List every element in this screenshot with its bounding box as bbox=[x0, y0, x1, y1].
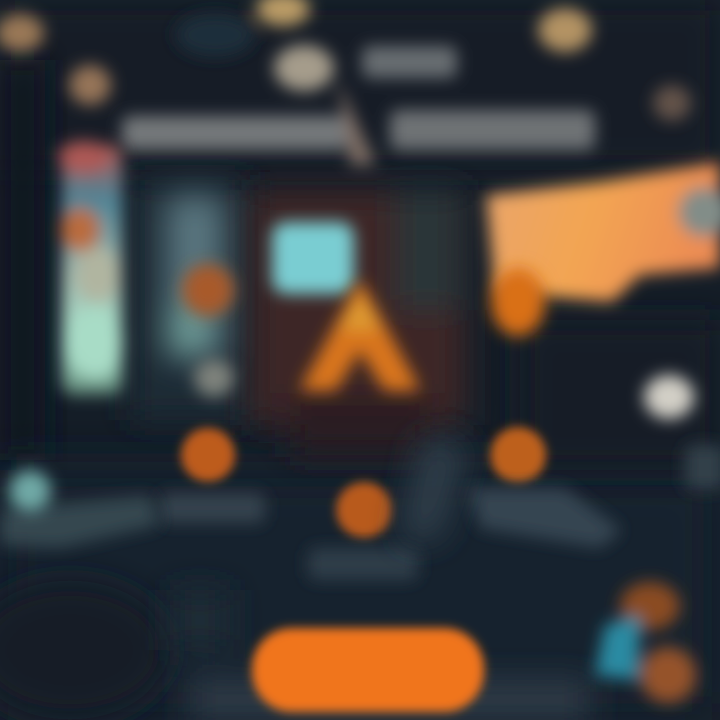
orange node: lower centre bbox=[308, 482, 418, 580]
orange node: lower left bbox=[160, 428, 265, 523]
left lower bar with teal dot bbox=[0, 470, 160, 548]
character figure bbox=[595, 582, 696, 703]
call-to-action button bbox=[252, 628, 484, 712]
icon: teal screen bbox=[272, 222, 354, 294]
orange node: lower right bbox=[468, 427, 622, 548]
orange node: upper left bbox=[182, 264, 234, 316]
icon: orange triangle bbox=[304, 285, 416, 388]
second column strip bbox=[165, 195, 225, 360]
orange node: upper right bbox=[491, 268, 545, 336]
center panel: dark red backdrop bbox=[250, 190, 465, 455]
title bbox=[122, 45, 595, 165]
lower bands bbox=[170, 440, 590, 720]
sunset panel bbox=[486, 162, 720, 302]
left coloured strip bbox=[58, 141, 123, 395]
top decorative lights bbox=[0, 0, 691, 121]
white light bbox=[644, 375, 694, 419]
right grey shape bbox=[685, 445, 720, 490]
small grey light bbox=[194, 359, 234, 397]
